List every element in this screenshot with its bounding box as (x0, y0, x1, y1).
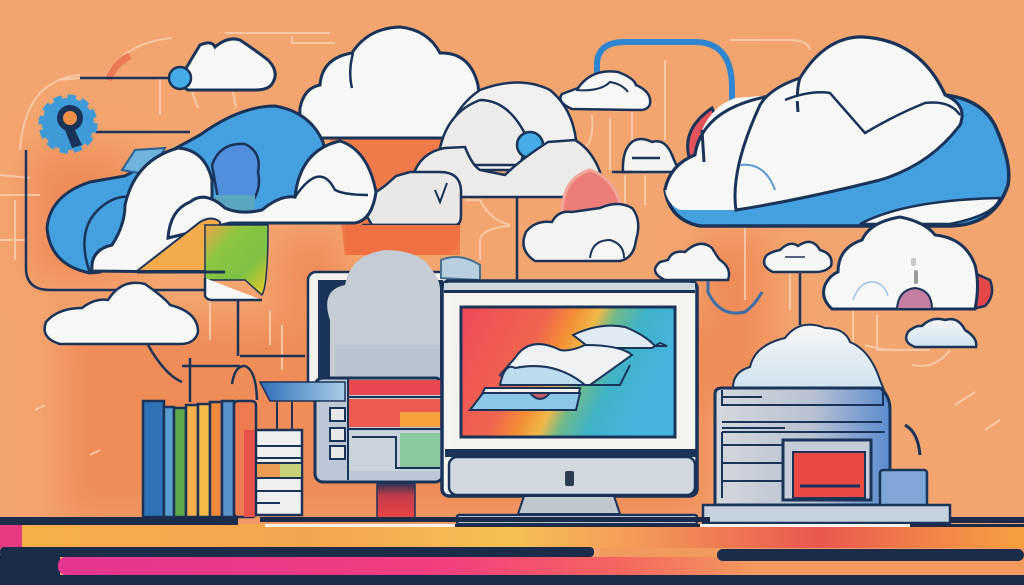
icon: gear (42, 98, 94, 150)
cloud: right mid (824, 217, 992, 309)
books: coloured binders (143, 401, 256, 517)
icon: blue node (169, 67, 191, 89)
triangle accent (137, 218, 220, 271)
cloud: big right (665, 37, 1009, 226)
base (457, 515, 697, 524)
cloud: small right of centre (655, 244, 729, 280)
cloud: top left small (169, 39, 275, 90)
panel: control strip (315, 378, 443, 482)
screen (461, 307, 675, 437)
panel: white card with check (362, 172, 461, 225)
server: small tower (256, 430, 302, 515)
cloud: inside back display (327, 250, 440, 378)
blue pipe arc (597, 42, 732, 108)
cloud: lower left (45, 283, 198, 344)
cloud: tiny (764, 242, 832, 272)
connector lines (26, 78, 800, 402)
circuit lines (0, 33, 1000, 455)
block: orange rectangle behind clouds (330, 138, 460, 255)
server: right building (703, 325, 950, 523)
base (703, 505, 950, 523)
cloud: on screen (470, 326, 667, 410)
cloud: small tag (612, 139, 680, 172)
background: darker orange centre (30, 150, 770, 520)
band: orange under grey card (345, 225, 460, 255)
monitor: back display (308, 250, 480, 519)
monitor: main (442, 281, 697, 524)
cloud: small top right of centre (560, 71, 650, 110)
cloud: large top centre (300, 27, 479, 138)
blob: inner darker blue (212, 144, 259, 210)
stand (518, 496, 620, 514)
cloud: left blue (47, 106, 376, 273)
stand: back display (377, 483, 415, 519)
icon: blue node (517, 132, 543, 158)
bottom stripes (0, 517, 1024, 585)
shape: blue cap (441, 257, 480, 280)
awning: blue (260, 382, 345, 401)
cloud: middle small (523, 170, 638, 261)
accent: red arc top left (108, 56, 130, 80)
cloud: roof (733, 325, 884, 390)
panel: red door (783, 440, 871, 500)
cloud: white front (92, 148, 212, 272)
box: side (880, 470, 927, 506)
wire: blue under right cloud (708, 280, 762, 313)
cloud: small lower right (906, 319, 976, 347)
cloud: white middle (168, 141, 376, 238)
panel: green card (137, 225, 268, 300)
chin (449, 457, 695, 495)
cloud: centre stack (412, 82, 600, 197)
hook: side (905, 425, 920, 455)
poles: awning (277, 402, 292, 430)
